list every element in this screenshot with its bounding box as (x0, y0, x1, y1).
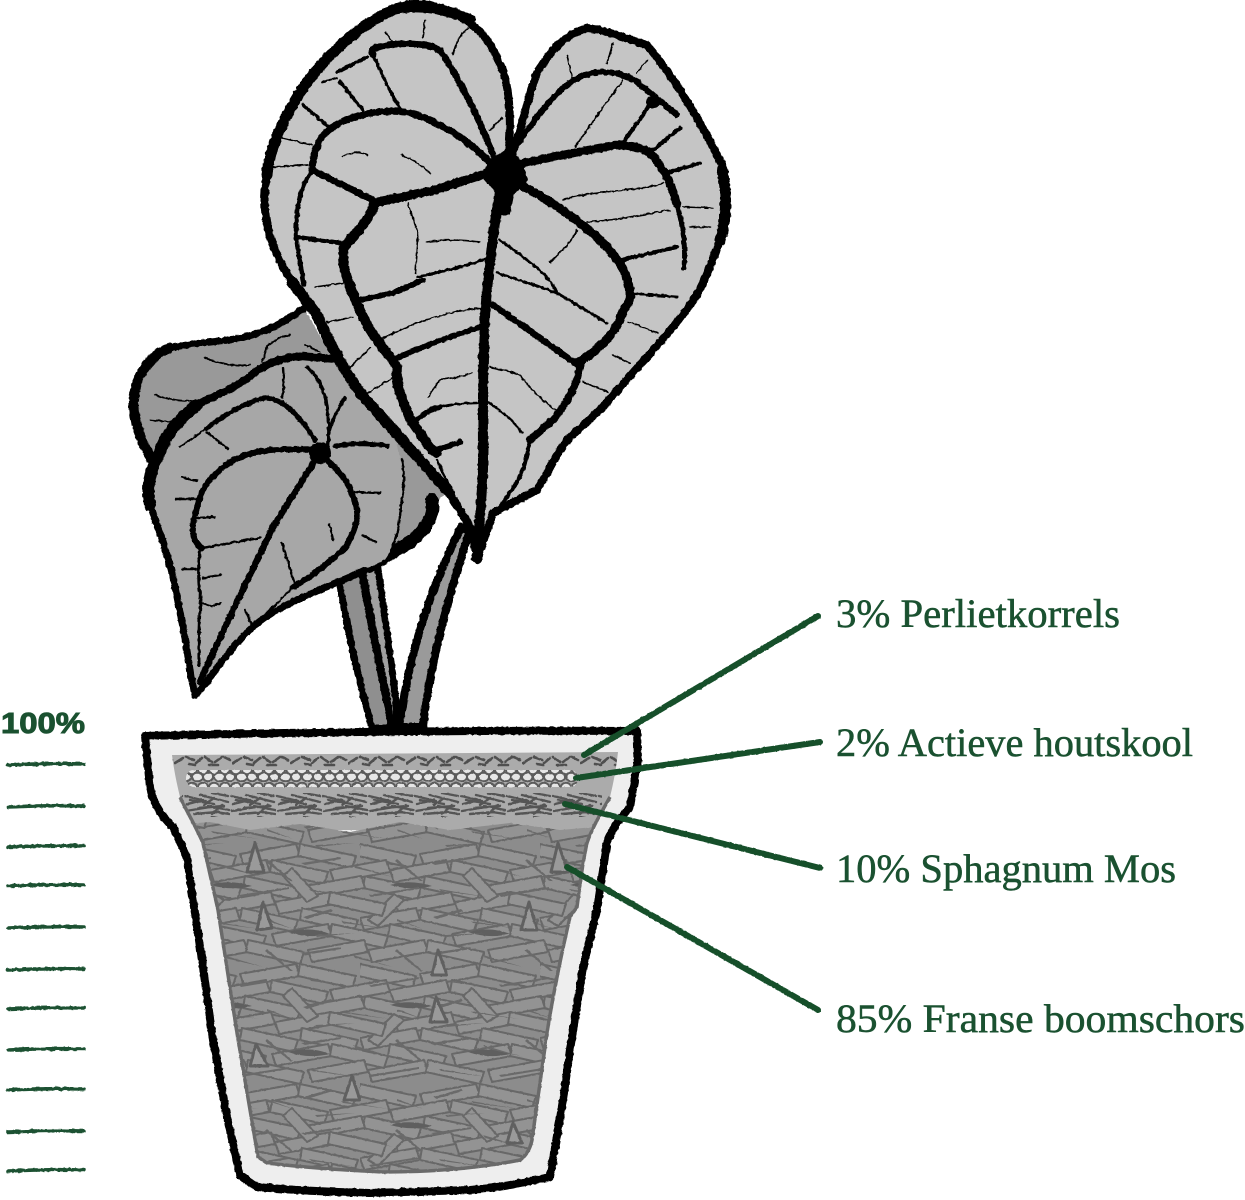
soil layers (160, 745, 630, 1180)
leader: charcoal (576, 742, 820, 778)
soil outline (180, 797, 610, 1172)
perlite layer (186, 770, 578, 787)
big leaf (265, 4, 726, 560)
sphagnum moss layer (182, 793, 602, 817)
label: moss: 10% Sphagnum Mos (836, 846, 1176, 891)
label: perlite: 3% Perlietkorrels (836, 591, 1120, 636)
leaf veins (272, 20, 713, 555)
tick marks (8, 764, 84, 1171)
leaf edge accents (267, 7, 726, 490)
pot with soil layers (145, 731, 638, 1193)
labels (836, 591, 1245, 1041)
100% label: 100% (1, 708, 85, 740)
front leaf (148, 356, 404, 695)
leaf veins (176, 367, 404, 682)
bark layer (196, 822, 592, 1170)
stem: left pair (335, 555, 399, 728)
stem: right (399, 527, 470, 727)
bark shards (247, 843, 568, 1143)
leader: moss (565, 804, 820, 868)
label: bark: 85% Franse boomschors (836, 996, 1245, 1041)
plant illustration (134, 4, 726, 728)
leader: bark (567, 867, 818, 1010)
vein hub (309, 442, 331, 464)
scale ruler (1, 708, 85, 1171)
pot body (145, 731, 638, 1193)
leader: perlite (584, 616, 818, 755)
label: charcoal: 2% Actieve houtskool (836, 720, 1193, 765)
charcoal layer (172, 755, 618, 768)
leader lines (565, 616, 820, 1010)
back leaf (134, 308, 447, 575)
